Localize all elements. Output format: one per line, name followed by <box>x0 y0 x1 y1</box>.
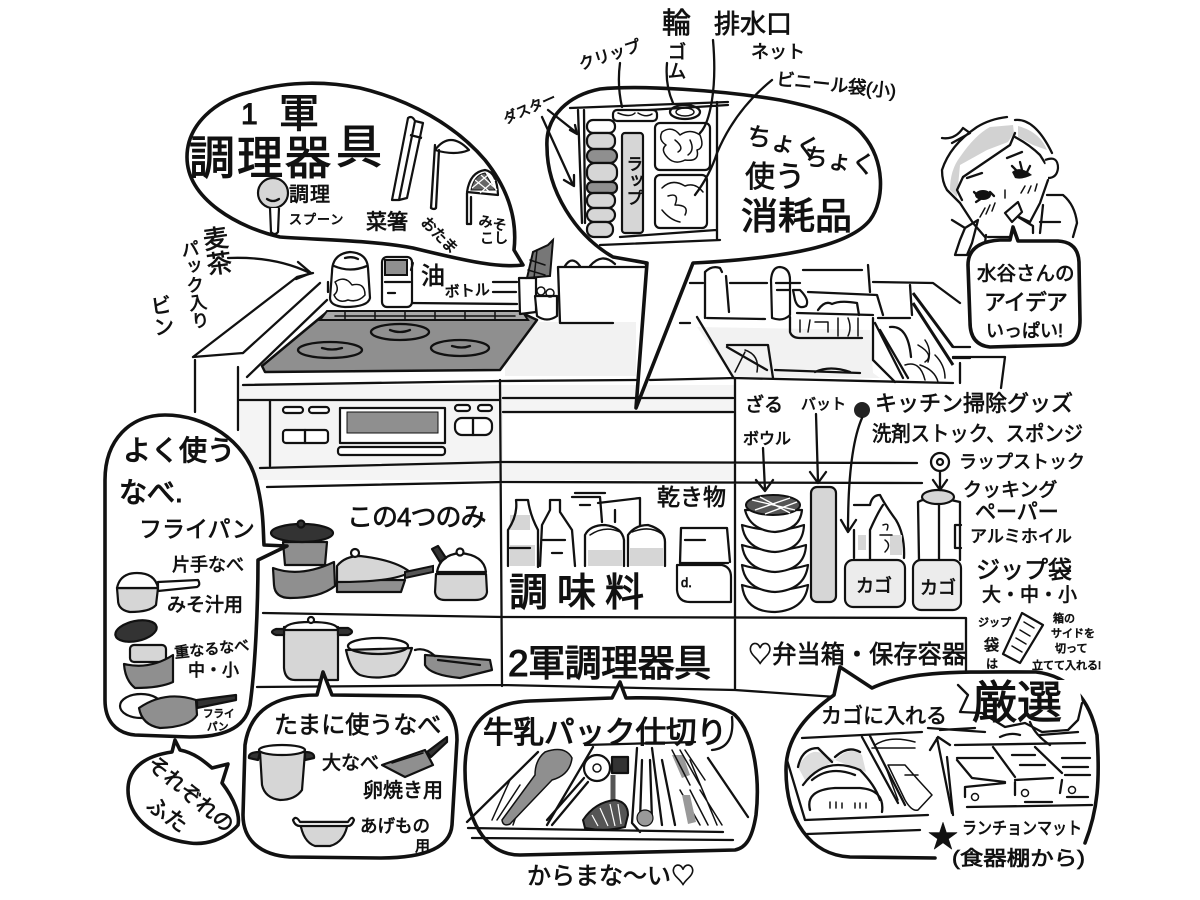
label: zip bags: ジップ袋 <box>976 557 1072 584</box>
top shelf pots <box>271 520 487 600</box>
shelf label: seasonings: 調味料 <box>509 572 653 615</box>
label: miso strainer: みそ <box>477 212 508 234</box>
text: pack: パック入り <box>178 239 210 331</box>
icon: cooking chopsticks <box>392 117 423 200</box>
character: Mizutani-san <box>942 117 1077 255</box>
text: bottle: ビン <box>147 293 175 338</box>
heading: 牛乳パック仕切り <box>483 716 727 750</box>
heading kanji: gun: 軍 <box>279 92 319 136</box>
shelf label: only these four: この4つのみ <box>347 502 485 532</box>
icon: cooking spoon <box>258 178 288 234</box>
spoon <box>502 750 572 825</box>
heading kanji: tools: 具 <box>336 121 382 173</box>
bubble: put into baskets <box>786 667 1098 870</box>
label: long chopsticks: 菜箸 <box>366 211 408 234</box>
sponge rack <box>790 302 862 338</box>
shelf label: lunch boxes and containers: ♡弁当箱・保存容器 <box>748 641 966 669</box>
basket one <box>845 495 905 607</box>
jar of barley tea packs <box>330 252 370 307</box>
seasoning shelf <box>508 493 731 602</box>
ear <box>1045 159 1058 178</box>
dots on plates <box>830 802 866 808</box>
label: use: 用 <box>415 838 430 855</box>
label: drain: 排水口 <box>714 9 792 39</box>
note text: 箱の <box>1053 611 1075 625</box>
bubble: frequently used consumables <box>547 88 880 408</box>
bullet <box>854 402 870 418</box>
text: oil: 油 <box>421 263 445 290</box>
label: miso strainer <box>477 212 508 246</box>
basket one: カゴ <box>856 576 892 596</box>
bubble text: consumables: 消耗品 <box>741 196 852 237</box>
zip bag box icon <box>1003 613 1043 663</box>
heading line 3: フライパン <box>139 516 255 542</box>
icon: dark lid <box>113 617 159 645</box>
lunch mats right <box>928 722 1092 815</box>
label: nested pots: 重なるなべ <box>174 637 250 662</box>
label: lunch mats: ランチョンマット <box>962 819 1082 838</box>
shoulder and sleeve <box>985 195 1077 243</box>
label: kitchen cleaning goods: キッチン掃除グッズ <box>875 391 1073 416</box>
text: put in baskets: カゴに入れる <box>821 705 947 728</box>
zip bag side label: ジップ <box>978 616 1011 629</box>
star: ★ <box>928 821 958 854</box>
bottles <box>705 267 807 319</box>
label: rubber band kanji: 輪 <box>662 7 691 40</box>
heading line 1: よく使う <box>123 435 235 466</box>
text: lid: ふた <box>142 792 193 837</box>
arrows down <box>756 414 947 532</box>
icon: frying bowl <box>293 818 354 846</box>
label: bowl: ボウル <box>743 430 791 448</box>
cutlery <box>672 755 696 824</box>
round slicer <box>584 755 610 781</box>
note text: 切って <box>1055 642 1087 655</box>
dry goods boxes <box>572 493 731 602</box>
label: frying: あげもの <box>360 816 430 836</box>
label: cooking spoon: 調理 <box>289 184 331 206</box>
eyes <box>974 162 1032 202</box>
white storage box <box>558 258 647 323</box>
text line 1: 水谷さんの <box>977 263 1075 285</box>
bubble: first-tier tools <box>187 83 523 266</box>
lower shelf pots <box>272 617 492 680</box>
sink area items <box>680 265 1005 388</box>
bowls <box>742 495 808 612</box>
bubble: occasionally used pans <box>243 672 457 858</box>
bottles <box>508 500 665 567</box>
zip bag side label <box>978 616 1011 671</box>
burst: carefully selected <box>958 677 1082 732</box>
label: wrap stock: ラップストック <box>959 452 1085 472</box>
tongs <box>640 760 652 820</box>
label: aluminium foil: アルミホイル <box>970 527 1072 546</box>
label: detergent stock, sponge: 洗剤ストック、スポンジ <box>872 423 1083 446</box>
dish in sink <box>727 345 850 378</box>
label: frying pan: フライ <box>203 708 234 720</box>
label: tray: バット <box>801 396 846 413</box>
text: each: それぞれの <box>143 752 238 837</box>
bubble text: use: 使う <box>745 161 805 194</box>
leader lines <box>542 40 772 195</box>
heading line 2: なべ. <box>119 477 183 508</box>
rubber bands <box>670 105 700 119</box>
label: for egg roll: 卵焼き用 <box>363 779 443 802</box>
drawer frame <box>570 102 728 245</box>
tray <box>811 487 836 602</box>
zip bag side label: 袋 <box>984 637 999 654</box>
label: single-handle pan: 片手なべ <box>172 555 244 575</box>
text line 3: いっぱい! <box>986 321 1063 341</box>
label: miso soup: みそ汁用 <box>167 594 243 616</box>
bubble: milk carton dividers <box>465 682 757 855</box>
text: bottle: ボトル <box>444 282 490 301</box>
shelf label: second-tier tools: 2軍調理器具 <box>508 643 711 684</box>
bubble: Mizutani-san's ideas <box>968 227 1080 347</box>
oil bottle <box>382 257 413 307</box>
note text: 立てて入れる! <box>1032 658 1101 672</box>
zip bag side label: は <box>986 657 998 671</box>
label: plastic bag small: ビニール袋(小) <box>776 69 897 102</box>
label: ladle: おたま <box>417 214 461 257</box>
label: duster: ダスター <box>501 89 558 127</box>
text line 2: アイデア <box>984 290 1067 315</box>
grill and knobs <box>283 405 492 455</box>
bubble: separate lids <box>128 740 238 843</box>
bubble text: chokuchoku <box>744 121 877 180</box>
label: large pot: 大なべ <box>322 752 379 774</box>
plastic bags box <box>655 175 707 228</box>
label: medium and small: 中・小 <box>188 661 239 680</box>
note text <box>1032 611 1101 672</box>
stove top <box>262 311 537 372</box>
utensil holder <box>519 240 557 320</box>
label: frying pan <box>203 708 234 733</box>
folded dusters <box>587 120 617 237</box>
hair shading <box>950 125 1047 197</box>
icon: nested pots <box>124 645 173 688</box>
label: oil bottle <box>421 263 490 301</box>
drawer dividers <box>467 742 748 840</box>
leader labels above drawer <box>501 7 897 195</box>
heading: cooking tools: 調理器 <box>189 132 333 184</box>
bowl stack, tray and baskets <box>742 487 961 612</box>
label: spoon: スプーン <box>289 212 344 227</box>
counter edge lines <box>193 273 735 466</box>
label: miso strainer: こし <box>480 230 508 246</box>
label d: d. <box>681 575 692 590</box>
label: from cupboard: (食器棚から) <box>952 847 1085 870</box>
heading: 1 gun: 1 <box>241 98 258 131</box>
heading: たまに使うなべ <box>274 712 441 739</box>
back counter items <box>328 240 647 323</box>
label: colander: ざる <box>745 393 783 416</box>
basket two: カゴ <box>920 578 956 598</box>
label: large medium small: 大・中・小 <box>982 584 1077 606</box>
arrow up <box>930 737 952 813</box>
cheeks and nose <box>980 184 1037 217</box>
bubble text: chokuchoku: ちょく <box>802 143 877 180</box>
cabinet grid <box>257 378 966 697</box>
caption: no tangles: からまな〜い♡ <box>527 863 695 890</box>
sink nets box <box>655 123 710 170</box>
pointing hand <box>952 220 978 255</box>
label: paper: ペーパー <box>975 501 1059 524</box>
basket contents left <box>787 732 932 834</box>
label: cooking paper: クッキング <box>963 479 1057 501</box>
label: barley tea jar <box>147 224 311 338</box>
bubble: frequently used pans <box>105 415 287 737</box>
dish rack <box>873 318 945 382</box>
wrap box <box>622 133 643 233</box>
arrow to jar <box>228 258 311 279</box>
text: barley tea: 麦茶 <box>198 224 233 277</box>
text: 厳選 <box>972 677 1062 728</box>
mouth <box>1005 202 1022 222</box>
zip bag note <box>978 611 1101 672</box>
icon: miso strainer <box>467 170 498 224</box>
note text: サイドを <box>1051 627 1095 640</box>
burners <box>298 324 489 358</box>
ring bullet <box>931 453 949 471</box>
cleaning goods labels <box>743 391 1085 606</box>
kitchen counter and cabinet <box>193 273 966 697</box>
icon: tamagoyaki pan <box>382 737 447 777</box>
label: net: ネット <box>751 42 805 62</box>
icon: small saucepan <box>117 573 199 612</box>
clips <box>613 110 657 121</box>
wrap label: ラップ <box>624 155 642 206</box>
icon: large pot <box>249 745 314 800</box>
icon: ladle <box>431 140 469 209</box>
shelf label: dried goods: 乾き物 <box>657 484 726 510</box>
head outline <box>942 117 1052 237</box>
label: frying pan: パン <box>207 721 229 733</box>
basket two <box>913 490 961 610</box>
icon: frying pan <box>120 694 236 728</box>
spatula <box>612 757 628 773</box>
label: rubber band kana: ゴム <box>664 42 686 80</box>
label: clip: クリップ <box>577 37 643 74</box>
bubble text: chokuchoku: ちょく <box>744 121 823 164</box>
